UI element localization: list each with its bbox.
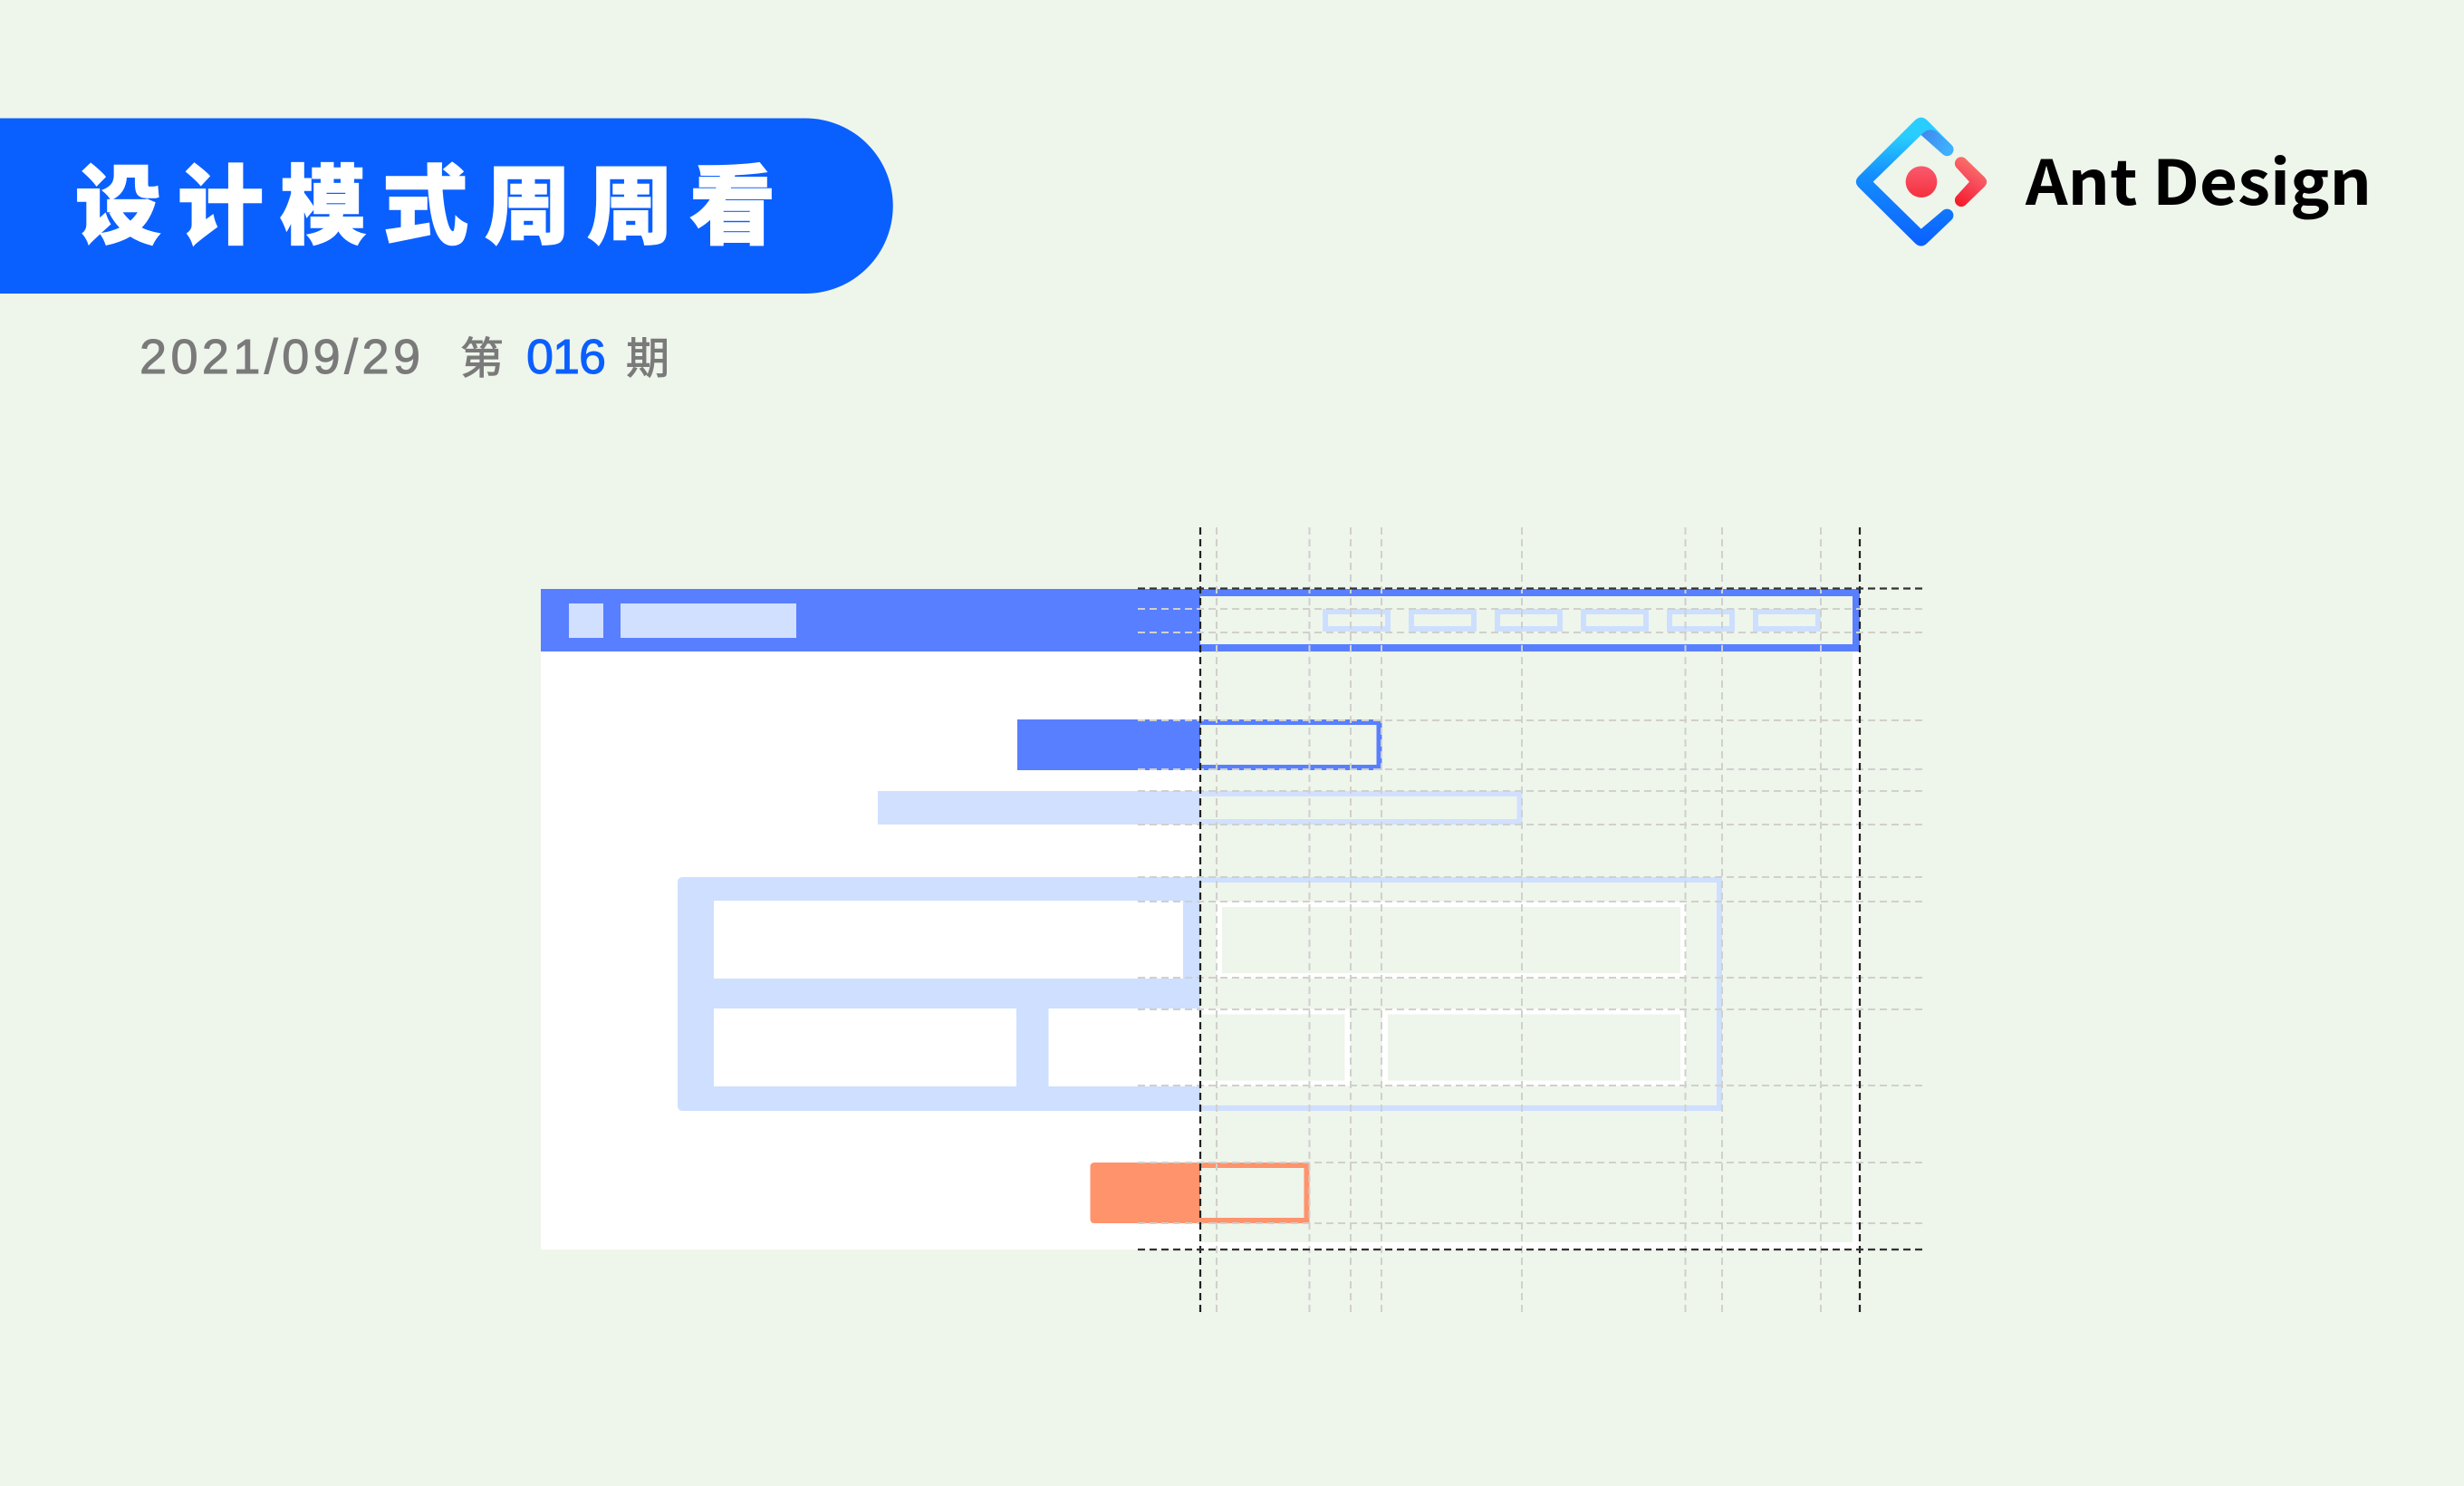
- nav items outlined: [1325, 612, 1818, 629]
- issue date line: 2021/09/29: [140, 330, 420, 384]
- heading block: [1017, 719, 1379, 770]
- wireframe illustration: [541, 527, 1922, 1312]
- form field row 2 right: [1385, 1011, 1683, 1084]
- title: 设计模式周周看: [75, 159, 775, 256]
- logo wordmark: Ant Design: [2025, 133, 2372, 223]
- nav bar: [541, 589, 1856, 651]
- orange button: [1091, 1163, 1306, 1223]
- issue date line: 期: [626, 335, 669, 383]
- subheading block: [878, 791, 1520, 825]
- black boundary guides: [1138, 527, 1922, 1312]
- form field row 2 left: [714, 1008, 1016, 1086]
- form card: [678, 877, 1719, 1111]
- gray layout guides: [1138, 527, 1922, 1312]
- issue date line: 016: [526, 330, 606, 384]
- page: outlined right half: [1200, 593, 1856, 1246]
- nav title block: [621, 603, 796, 638]
- title banner: [0, 118, 893, 294]
- form field row 2 middle: [1049, 1008, 1348, 1086]
- form field row 1: [714, 901, 1683, 979]
- issue date line: [140, 330, 669, 384]
- issue date line: 第: [460, 335, 504, 383]
- logo: Ant Design mark: [1856, 118, 1987, 246]
- nav logo square: [569, 603, 603, 638]
- page: solid left half: [541, 589, 1200, 1250]
